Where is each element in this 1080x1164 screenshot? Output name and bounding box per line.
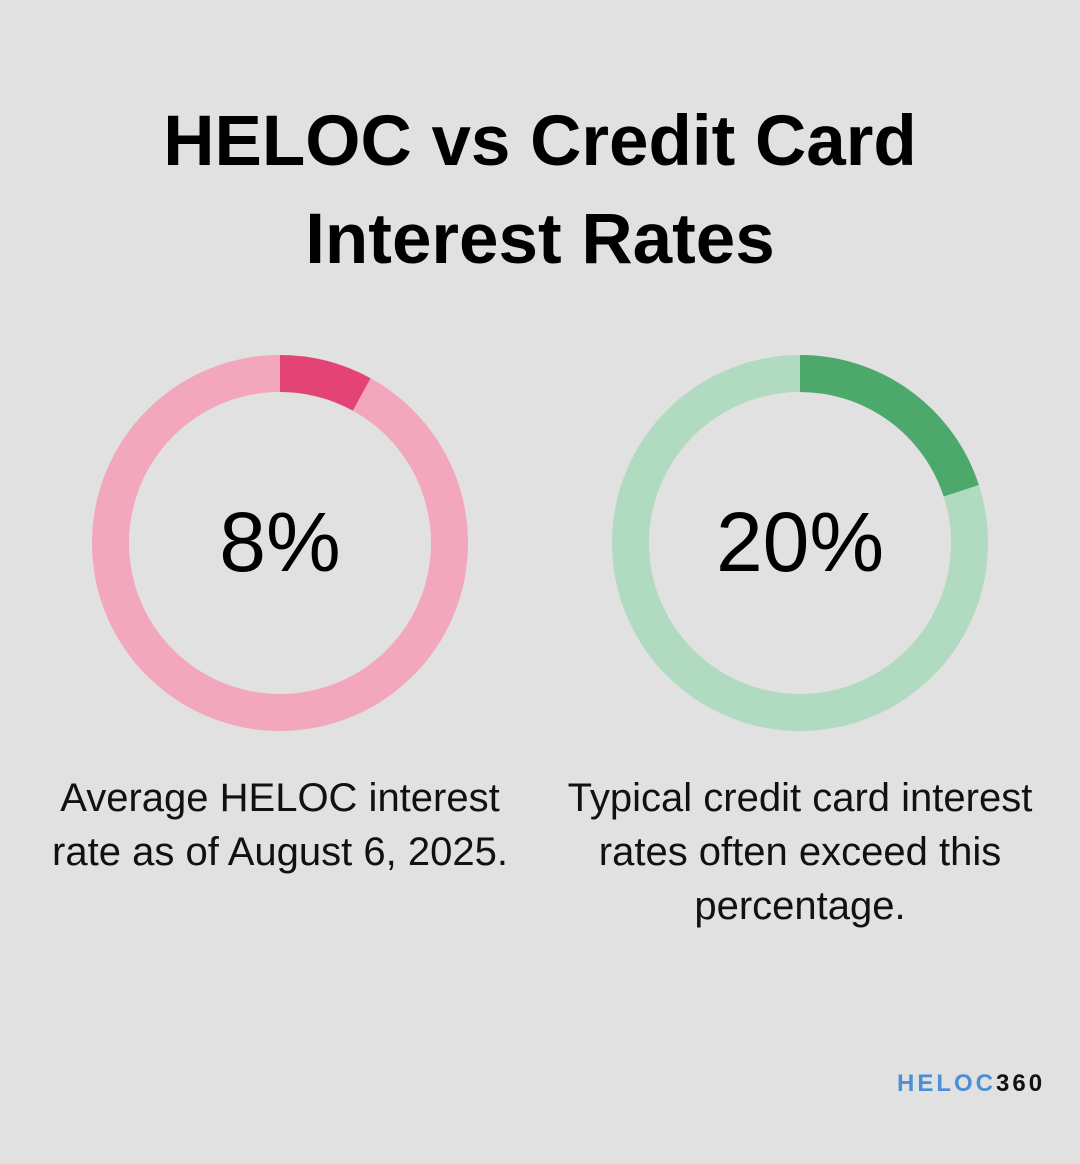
title: HELOC vs Credit Card: [163, 102, 917, 181]
caption: credit card: Typical credit card interest rates often exceed this percentage.: [568, 776, 1032, 928]
donut: HELOC 8%: [92, 355, 468, 731]
title: Interest Rates: [305, 200, 775, 279]
title: [163, 102, 917, 279]
caption: HELOC: Average HELOC interest rate as of August 6, 2025.: [52, 776, 508, 874]
donut: HELOC 8%: 8%: [219, 495, 341, 589]
donut: credit card 20%: 20%: [716, 495, 884, 589]
logo: HELOC360: [897, 1070, 1045, 1097]
donut: credit card 20%: [612, 355, 988, 731]
